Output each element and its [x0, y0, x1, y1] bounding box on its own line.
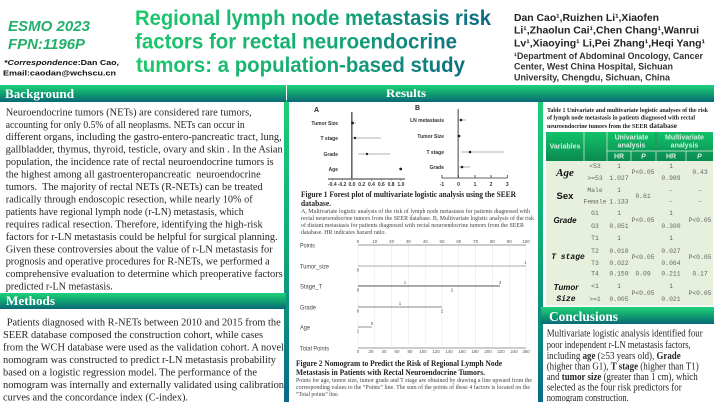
- background text: radically through endoscopic resection, while nearly 10% of: [6, 194, 253, 206]
- forest plot A: 0.8: [388, 182, 395, 188]
- row: T stage: T4: [591, 270, 599, 278]
- row: tumor size: Size: [556, 295, 576, 304]
- forest plot B: LN metastasis: [410, 118, 444, 124]
- nomogram axis: grade: [300, 301, 444, 314]
- row: grade: P<0.05: [688, 217, 712, 224]
- panel: conclusions: [541, 307, 714, 402]
- event and poster number: ESMO 2023: [8, 19, 90, 35]
- row: T stage: 0.027: [661, 248, 681, 255]
- conclusions text: [547, 328, 703, 402]
- table title: of lymph node metastasis in patients diagnosed with rectal: [547, 114, 695, 122]
- forest plot A: 1.0: [397, 182, 405, 188]
- background text: gallbladder, thymus, thyroid, testicle, ovary and skin . In the Asian: [6, 145, 284, 156]
- background text: [6, 107, 284, 293]
- heading: methods: Methods: [6, 294, 55, 308]
- results heading: Results: [386, 86, 426, 100]
- figure 2 caption: Figure 2 Nomogram to Predict the Risk of Regional Lymph Node: [296, 359, 502, 368]
- row: T stage: [551, 235, 712, 278]
- forest plot A: T stage: [320, 136, 338, 142]
- nomogram axis: points: 0: [357, 239, 360, 244]
- nomogram axis: total points: 60: [395, 349, 400, 354]
- forest plot A: -0.2: [338, 182, 347, 188]
- nomogram axis: grade: 0: [357, 308, 360, 314]
- row: tumor size: 1: [617, 283, 621, 290]
- forest plot A: Age: [329, 167, 338, 173]
- row: age: 1.027: [609, 175, 629, 182]
- figure 1 caption: [301, 190, 535, 236]
- row: T stage: T3: [591, 260, 599, 267]
- nomogram axis: points: 60: [456, 239, 462, 244]
- nomogram axis: points: 70: [473, 239, 479, 244]
- nomogram axis: points: 10: [372, 239, 378, 244]
- nomogram axis: age: [300, 321, 374, 334]
- forest plot B: 0: [457, 182, 460, 188]
- forest plot A: A: [314, 107, 319, 114]
- nomogram axis: stage T: 0: [357, 288, 360, 292]
- conclusions text: selected as the four risk predictors for: [547, 382, 682, 394]
- nomogram axis: points: 90: [507, 239, 512, 244]
- conclusions text: and tumor size (greater than 1 cm), which: [547, 372, 698, 383]
- methods text: Patients diagnosed with R-NETs between 2010 and 2015 from the: [7, 317, 281, 328]
- nomogram axis: stage T: 2: [451, 288, 454, 292]
- nomogram axis: total points: 0: [357, 349, 360, 354]
- affiliation: [514, 51, 704, 82]
- figure 1 caption: Figure 1 Forest plot of multivariate logistic analysis using the SEER: [301, 190, 516, 199]
- conclusions text: (higher than G1), T stage (higher than T1): [547, 362, 699, 372]
- heading: conclusions: [541, 307, 714, 325]
- row: T stage: T stage: [551, 253, 585, 262]
- row: sex: 1.133: [609, 198, 629, 206]
- row: sex: 0.61: [635, 193, 651, 200]
- nomogram axis: points: 40: [423, 239, 428, 244]
- figure 2 caption: Metastasis in Patients with Rectal Neuroendocrine Tumors.: [296, 368, 485, 377]
- column separators: [284, 100, 543, 402]
- forest plot B: B: [415, 105, 420, 112]
- nomogram axis: total points: 100: [419, 349, 427, 354]
- figure 2 caption: Points for age, tumor size, tumor grade and T stage are obtained by drawing a line upward from the: [296, 377, 532, 384]
- row: tumor size: Tumor: [554, 283, 579, 292]
- table header: Multivariate: [665, 134, 704, 142]
- nomogram axis: points: 20: [389, 239, 395, 244]
- nomogram axis: stage T: Stage_T: [300, 284, 322, 290]
- figure 2 caption: corresponding values to the “Points” line. The sum of the points of these 4 factors is located on the: [296, 384, 530, 391]
- nomogram axis: tumor size: [300, 260, 527, 272]
- forest plot A: 0.6: [378, 182, 385, 188]
- title: [135, 7, 491, 77]
- methods text: [3, 317, 285, 402]
- nomogram axis: age: 0: [371, 321, 374, 326]
- nomogram axis: grade: Grade: [300, 304, 316, 312]
- nomogram axis: stage T: 3: [499, 280, 502, 285]
- nomogram axis: points: [300, 239, 530, 250]
- figure 1 caption: of distant metastasis for patients diagnosed with rectal neuroendocrine tumors from the SEER: [301, 222, 525, 229]
- row: age: 1: [617, 163, 621, 170]
- heading: background: Background: [5, 87, 74, 101]
- heading: background: [0, 85, 286, 102]
- row: sex: Sex: [557, 191, 574, 202]
- heading: methods: [0, 293, 286, 309]
- row: age: 0.43: [692, 169, 708, 176]
- nomogram axis: points: 100: [522, 239, 530, 244]
- row: T stage: 0.211: [661, 270, 681, 278]
- row: T stage: P<0.05: [631, 254, 655, 261]
- forest plot A: Tumor Size: [311, 121, 338, 127]
- correspondence: Email:caodan@wchscu.cn: [3, 68, 116, 78]
- nomogram axis: points: 50: [440, 239, 445, 244]
- figure 2 caption: [296, 359, 532, 398]
- authors: Lv¹,Xiaoying¹ Li,Pei Zhang¹,Heqi Yang¹: [514, 38, 706, 49]
- panel: background: [0, 85, 286, 293]
- nomogram axis: total points: Total Points: [300, 346, 330, 352]
- table 1: [546, 132, 713, 306]
- nomogram axis: total points: 180: [471, 349, 479, 354]
- authors: Li¹,Zhaolun Cai¹,Chen Chang¹,Wanrui: [514, 26, 699, 37]
- background text: population, the incidence rate of rectal neuroendocrine tumors is: [6, 157, 274, 168]
- row: sex: Male: [587, 187, 603, 194]
- nomogram axis: total points: 160: [458, 349, 466, 354]
- row: tumor size: P<0.05: [688, 290, 712, 297]
- row: grade: [553, 210, 712, 230]
- panel: methods: [0, 293, 286, 402]
- row: grade: 0.300: [661, 223, 681, 230]
- nomogram axis: age: Age: [300, 324, 310, 332]
- background text: accounting for only 0.5% of all neoplasms. NETs can occur in: [6, 120, 245, 131]
- table header: Univariate: [615, 134, 649, 142]
- background text: factors for r-LN metastasis could be helpful for surgical planning.: [6, 232, 278, 243]
- row: grade: 1: [669, 210, 673, 217]
- table header: HR: [614, 154, 624, 160]
- event and poster number: FPN:1196P: [8, 37, 85, 53]
- figure 2 caption: “Total points” line.: [296, 391, 339, 398]
- methods text: nomogram was constructed to predict r-LN metastasis probability: [3, 355, 277, 366]
- row: sex: 1: [617, 187, 621, 194]
- background text: patients have regional lymph node (r-LN) metastasis, which: [6, 207, 244, 218]
- forest plot B: -1: [440, 182, 444, 188]
- row: tumor size: P<0.05: [631, 290, 655, 297]
- forest plot B: Grade: [430, 165, 444, 171]
- nomogram axis: stage T: [300, 280, 502, 292]
- nomogram axis: total points: 20: [369, 349, 374, 354]
- row: sex: –: [698, 198, 702, 206]
- row: age: <53: [589, 163, 601, 170]
- conclusions text: including age (≥53 years old), Grade: [547, 351, 681, 362]
- nomogram: [300, 239, 530, 354]
- row: T stage: 0.064: [661, 260, 681, 267]
- table title: Table 1 Univariate and multivariate logistic analyses of the risk: [547, 107, 709, 114]
- nomogram axis: total points: 80: [408, 349, 413, 354]
- table header: analysis: [618, 142, 645, 150]
- background text: comprehensive evaluation to determine which preoperative factors: [6, 269, 283, 280]
- title: Regional lymph node metastasis risk: [135, 7, 491, 30]
- table title: [547, 107, 709, 130]
- nomogram axis: total points: 40: [382, 349, 387, 354]
- figure 1 caption: A, Multivariate logistic analysis of the risk of lymph node metastasis for patients diagnosed with: [301, 208, 531, 215]
- row: tumor size: 0.005: [609, 296, 629, 303]
- row: T stage: P<0.05: [688, 254, 712, 261]
- methods text: nomogram was internally and externally validated using calibration: [3, 380, 285, 391]
- nomogram axis: total points: 140: [445, 349, 453, 354]
- table header: Variables: [550, 144, 580, 150]
- row: age: P<0.05: [631, 169, 655, 176]
- table header: [546, 132, 713, 161]
- table header: P: [641, 154, 646, 160]
- row: T stage: T2: [591, 248, 599, 255]
- background text: requires radical resection. Therefore, identifying the high-risk: [6, 219, 264, 230]
- forest plot B: [410, 105, 509, 188]
- forest plot A: 0.4: [368, 182, 375, 188]
- forest plot A: [311, 107, 405, 188]
- row: T stage: 0.09: [635, 270, 651, 278]
- nomogram axis: total points: 260: [522, 349, 530, 354]
- affiliation: Center, West China Hospital, Sichuan: [514, 62, 673, 72]
- nomogram axis: total points: 240: [510, 349, 518, 354]
- table header: HR: [666, 154, 676, 160]
- nomogram axis: total points: 220: [497, 349, 505, 354]
- affiliation: University, Chengdu, Sichuan, China: [514, 72, 670, 82]
- table header: P: [697, 154, 702, 160]
- background text: tumors. The majority of rectal NETs (R-NETs) can be treated: [6, 182, 263, 193]
- nomogram axis: total points: 120: [432, 349, 440, 354]
- row: T stage: 1: [617, 235, 621, 242]
- row: age: [555, 163, 708, 182]
- row: T stage: T1: [591, 235, 599, 242]
- row: sex: –: [669, 198, 673, 206]
- forest plot B: T stage: [426, 150, 444, 156]
- row: T stage: 0.010: [609, 248, 629, 255]
- nomogram axis: points: 30: [406, 239, 411, 244]
- row: tumor size: [554, 283, 712, 304]
- row: grade: 1: [617, 210, 621, 217]
- row: age: >=53: [587, 175, 603, 182]
- table header: analysis: [671, 142, 698, 150]
- methods text: from the WCH database were used as the validation cohort. A novel: [3, 342, 284, 353]
- row: tumor size: >=1: [589, 296, 601, 303]
- background text: different organs, including the gastro-entero-pancreatic tract, lung,: [6, 132, 282, 143]
- row: age: Age: [555, 167, 574, 179]
- nomogram axis: total points: [300, 346, 530, 354]
- forest plot A: -0.4: [328, 182, 337, 188]
- background text: the highest among all gastroenteropancreatic neuroendocrine: [6, 170, 261, 181]
- background text: Given these controversies about the value of r-LN metastasis for: [6, 244, 273, 255]
- nomogram axis: points: 80: [490, 239, 495, 244]
- correspondence: [3, 58, 119, 78]
- methods text: SEER database composed the construction cohort, while cases: [3, 330, 263, 341]
- forest plot A: 0.2: [358, 182, 365, 188]
- row: sex: [557, 187, 702, 206]
- row: tumor size: 0.021: [661, 296, 681, 303]
- nomogram axis: grade: 1: [399, 301, 402, 306]
- forest plot B: 3: [506, 182, 509, 188]
- background text: Neuroendocrine tumors (NETs) are considered rare tumors,: [6, 107, 252, 118]
- figure 1 caption: database.: [301, 199, 331, 208]
- nomogram axis: age: 1: [357, 328, 360, 334]
- row: tumor size: <1: [591, 283, 599, 290]
- nomogram axis: total points: 200: [484, 349, 492, 354]
- event and poster number: [8, 19, 90, 53]
- figure 1 caption: database. HR indicates hazard ratio.: [301, 229, 386, 236]
- authors: [514, 13, 706, 49]
- row: T stage: 0.159: [609, 270, 629, 278]
- row: T stage: 1: [669, 235, 673, 242]
- table title: neuroendocrine tumors from the SEER database: [547, 121, 678, 130]
- figure 1 caption: rectal neuroendocrine tumors from the SEER database. B, Multivariate logistic analysis of the risk: [301, 215, 535, 222]
- row: grade: G1: [591, 210, 599, 217]
- nomogram axis: tumor size: 0: [357, 268, 360, 272]
- title: tumors: a population-based study: [136, 54, 465, 77]
- forest plot B: Tumor Size: [417, 134, 444, 140]
- nomogram axis: grade: 2: [441, 308, 444, 314]
- row: grade: G3: [591, 223, 599, 230]
- forest plot B: 1: [474, 182, 477, 188]
- row: age: 0.989: [661, 175, 681, 182]
- heading: conclusions: Conclusions: [549, 310, 619, 325]
- row: grade: P<0.05: [631, 217, 655, 224]
- nomogram axis: tumor size: 1: [524, 260, 527, 265]
- authors: Dan Cao¹,Ruizhen Li¹,Xiaofen: [514, 13, 659, 24]
- background text: prognosis and operative procedures for R-NETs, we performed a: [6, 257, 270, 268]
- affiliation: ¹Department of Abdominal Oncology, Cancer: [514, 51, 704, 61]
- row: sex: –: [698, 187, 702, 194]
- forest plot A: 0.0: [349, 182, 356, 188]
- background text: predicted r-LN metastasis.: [6, 282, 113, 293]
- row: age: 1: [669, 163, 673, 170]
- nomogram axis: points: Points: [300, 242, 316, 250]
- row: grade: 0.051: [609, 223, 629, 230]
- row: grade: Grade: [553, 216, 577, 225]
- forest plot A: Grade: [324, 152, 338, 158]
- row: sex: –: [669, 187, 673, 194]
- row: tumor size: 1: [669, 283, 673, 290]
- nomogram axis: stage T: 1: [404, 280, 407, 285]
- title: factors for rectal neuroendocrine: [135, 30, 457, 54]
- row: T stage: 0.022: [609, 260, 629, 267]
- row: T stage: 0.17: [692, 270, 708, 278]
- methods text: based on a logistic regression model. The performance of the: [3, 367, 257, 378]
- results heading: [287, 85, 714, 102]
- correspondence: *Correspondence :Dan Cao,: [4, 58, 119, 67]
- forest plot B: 2: [490, 182, 493, 188]
- table body: [546, 161, 713, 306]
- row: sex: Female: [583, 198, 607, 206]
- nomogram axis: tumor size: Tumor_size: [300, 264, 329, 270]
